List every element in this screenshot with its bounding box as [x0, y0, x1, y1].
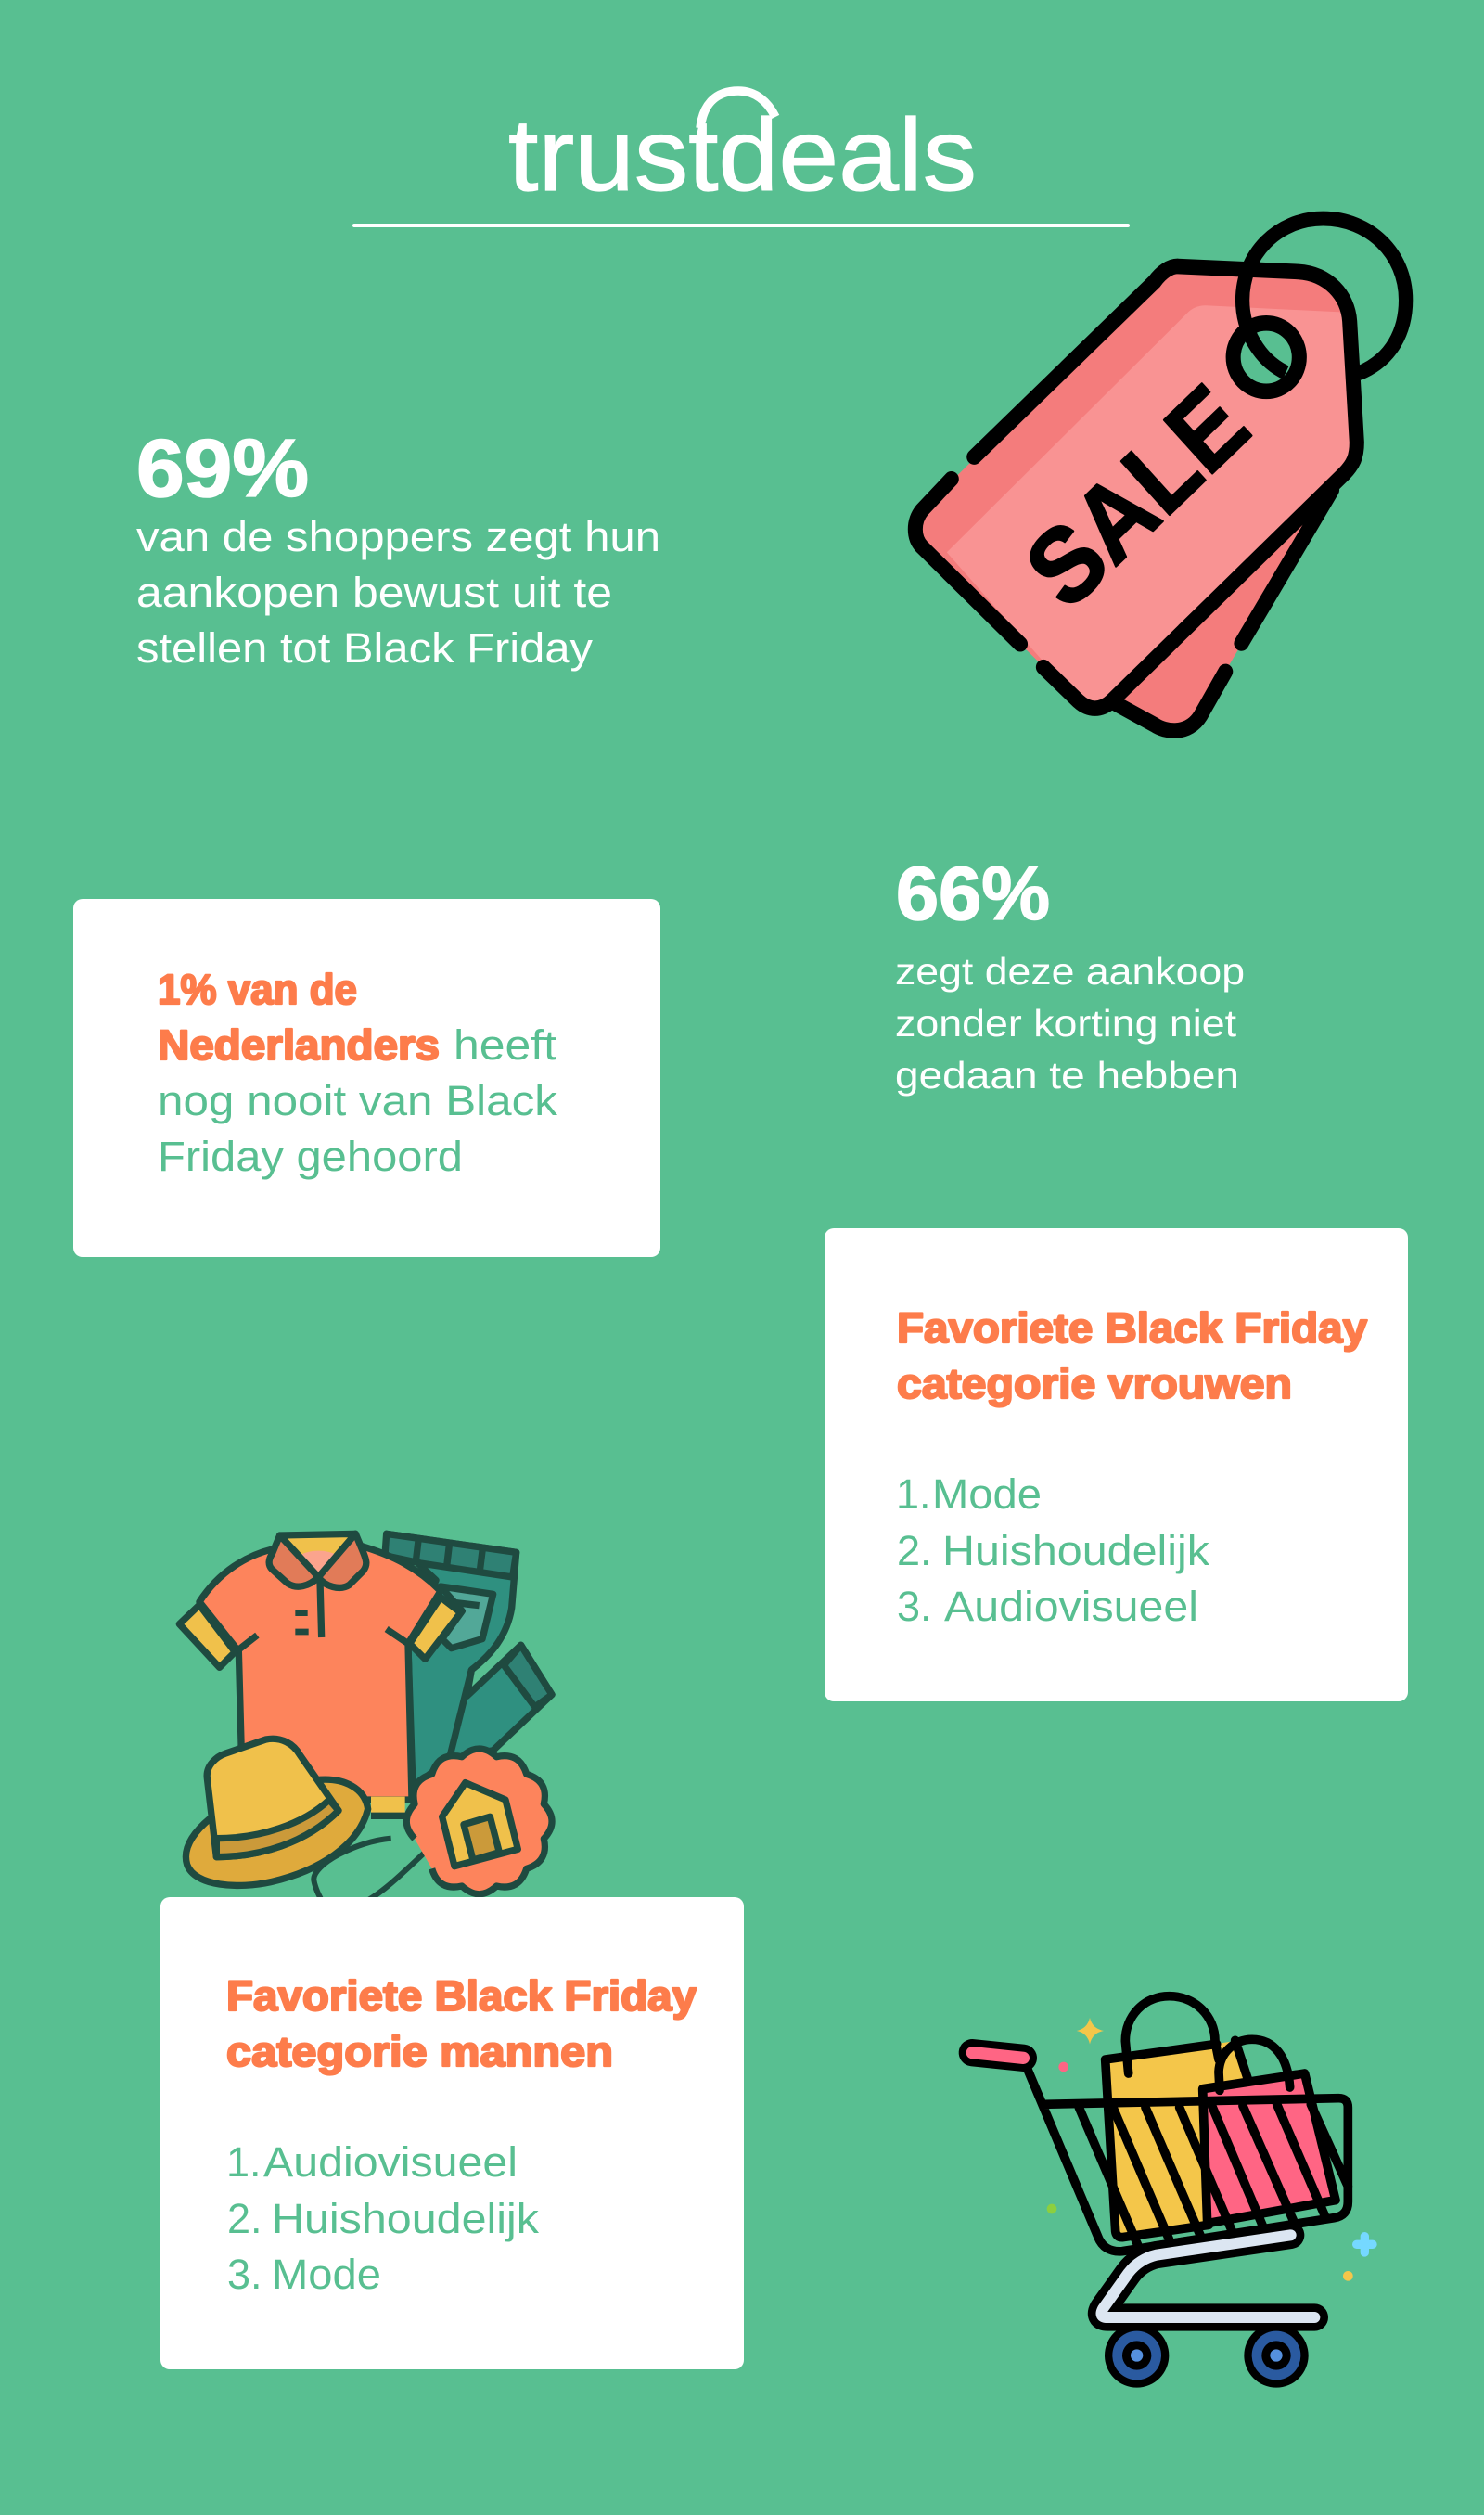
stat: 66%: zegt deze aankoop [895, 950, 1245, 993]
tag string [1243, 219, 1406, 373]
card: favourite categories men: Mode [272, 2251, 381, 2298]
hat [186, 1739, 368, 1885]
stat: 69% [136, 422, 660, 672]
rear tag [1116, 497, 1322, 727]
stat: 66% [895, 852, 1245, 1097]
sparkles [1047, 2018, 1373, 2281]
card: favourite categories men: Huishoudelijk [272, 2195, 540, 2242]
stat: 66%: zonder korting niet [895, 1002, 1237, 1045]
stat: 66%: gedaan te hebben [895, 1054, 1239, 1097]
basket wires [1079, 2104, 1348, 2245]
stat: 69%: stellen tot Black Friday [136, 624, 594, 672]
stat: 69%: 69% [136, 422, 309, 514]
stat: 66%: 66% [896, 852, 1050, 936]
card: favourite categories men: 2. [227, 2195, 262, 2242]
card: favourite categories women [825, 1228, 1408, 1701]
cart base [1101, 2235, 1314, 2317]
card: favourite categories women: Huishoudelijk [942, 1527, 1210, 1574]
card: favourite categories men: categorie mannen [226, 2028, 613, 2075]
front tag body [915, 266, 1357, 709]
card: 1% of Dutch people: 1% van de [158, 966, 357, 1013]
card: favourite categories women: Mode [932, 1470, 1042, 1518]
icon: clothing, hat and home badge [179, 1533, 552, 1900]
card: favourite categories men [160, 1897, 744, 2369]
card: 1% of Dutch people: Nederlanders [158, 1021, 440, 1069]
icon: shopping cart [972, 1996, 1373, 2388]
card: 1% of Dutch people: heeft [454, 1021, 557, 1069]
card: favourite categories women: Favoriete Black Friday [897, 1304, 1367, 1352]
hat strap [313, 1839, 429, 1900]
card: favourite categories women: 2. [897, 1527, 932, 1574]
card: favourite categories men: Audiovisueel [263, 2138, 518, 2186]
card: favourite categories women: Audiovisueel [944, 1583, 1198, 1630]
basket frame [1028, 2071, 1348, 2252]
card: 1% of Dutch people: nog nooit van Black [158, 1077, 558, 1124]
stat: 69%: aankopen bewust uit te [136, 569, 612, 616]
jeans [385, 1533, 552, 1788]
card: favourite categories women: categorie vrouwen [897, 1360, 1292, 1407]
tag lettering: SALE [1004, 363, 1270, 630]
yellow bag [1106, 1996, 1247, 2238]
logo: trustdeals: trustdeals [508, 98, 977, 212]
card: 1% of Dutch people: Friday gehoord [158, 1133, 463, 1180]
stat: 69%: van de shoppers zegt hun [136, 513, 660, 560]
cart wheels [1105, 2323, 1309, 2388]
pink bag [1203, 2039, 1336, 2224]
cart handle [972, 2053, 1023, 2058]
icon: sale tag [915, 219, 1406, 731]
card: favourite categories men: 3. [227, 2251, 262, 2298]
polo shirt [179, 1533, 461, 1816]
card: 1% of Dutch people [73, 899, 660, 1257]
card: favourite categories men: Favoriete Black Friday [226, 1972, 697, 2020]
home badge [406, 1749, 552, 1894]
card: favourite categories women: 1. [896, 1470, 931, 1518]
tag hole [1234, 323, 1299, 391]
tag outline [915, 266, 1357, 709]
card: favourite categories women: 3. [897, 1583, 932, 1630]
card: favourite categories men: 1. [226, 2138, 262, 2186]
